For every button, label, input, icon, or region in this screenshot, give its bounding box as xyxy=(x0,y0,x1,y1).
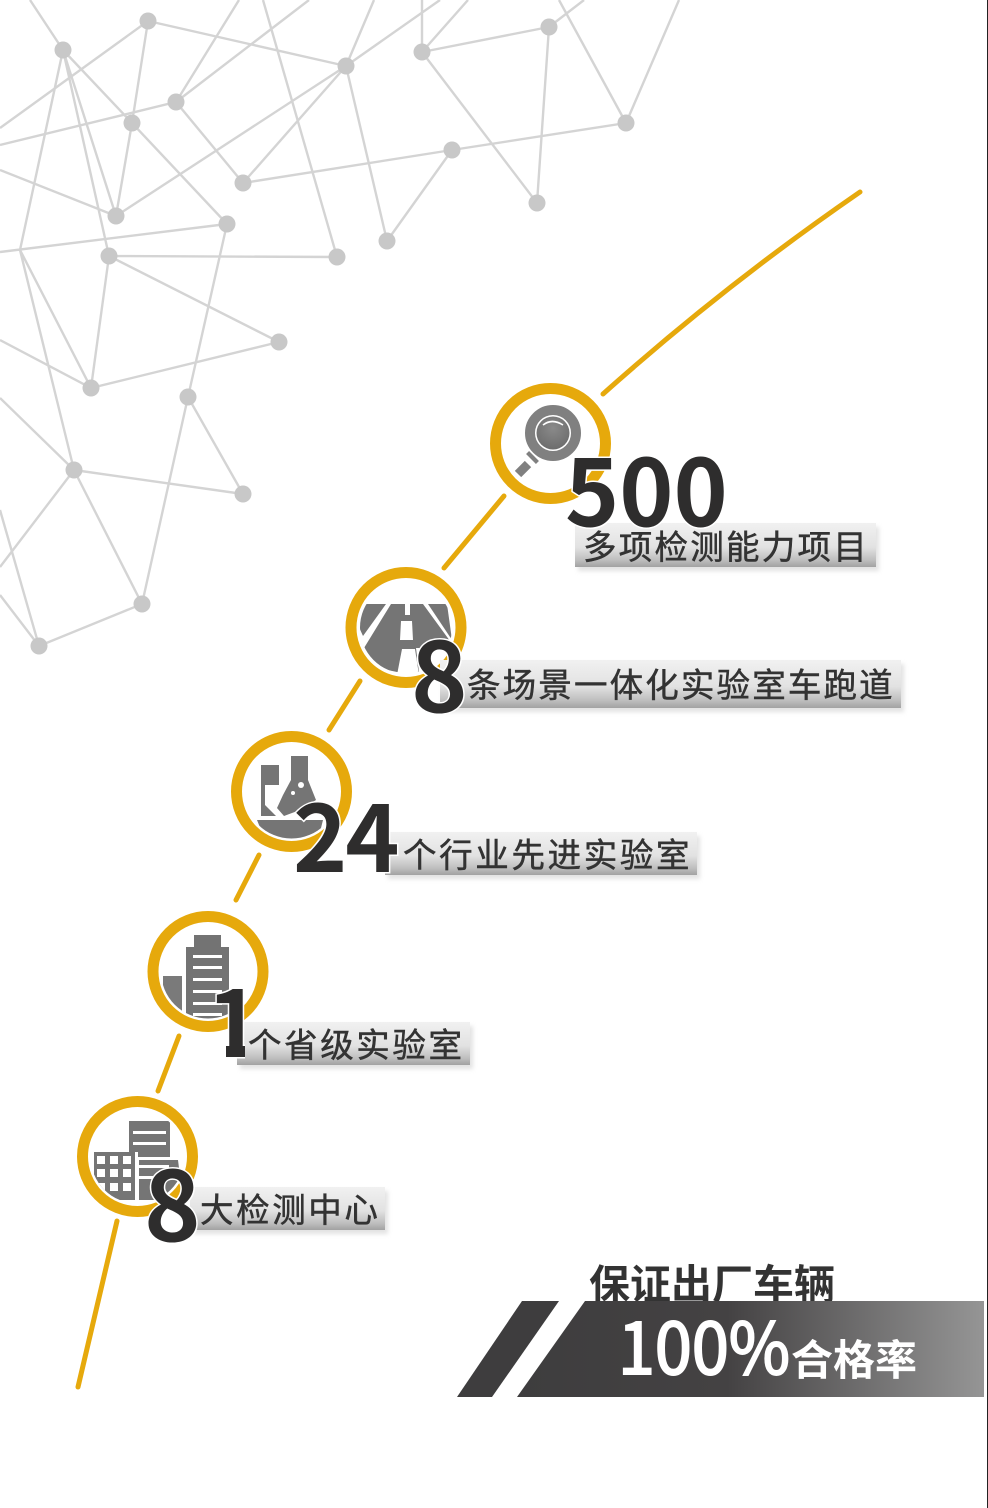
right edge line xyxy=(987,0,988,1508)
pass rate label: 合格率 xyxy=(791,1327,917,1388)
number 8: 8 xyxy=(144,1130,201,1269)
icon ring and magnifier xyxy=(496,388,606,498)
label bar: 个行业先进实验室 xyxy=(403,828,692,877)
step 8: runways xyxy=(351,572,904,740)
gold timeline path xyxy=(78,192,860,1387)
callout heading: 保证出厂车辆 xyxy=(589,1251,835,1311)
background network pattern xyxy=(0,0,679,654)
step 8: inspection centres xyxy=(77,1096,389,1242)
number 8: 8 xyxy=(411,601,468,740)
100% figure: 100% xyxy=(618,1293,790,1395)
step 500: inspection items xyxy=(496,388,879,571)
number 24: 24 xyxy=(293,766,398,899)
icon ring and tower xyxy=(153,916,263,1026)
icon ring and buildings xyxy=(82,1102,192,1212)
number 500: 500 xyxy=(565,420,728,553)
bottom callout xyxy=(457,1251,984,1397)
icon ring and road xyxy=(351,572,461,682)
step 1: provincial lab xyxy=(153,916,473,1084)
gradient banner xyxy=(517,1301,984,1397)
number 1: 1 xyxy=(207,951,261,1084)
label bar: 条场景一体化实验室车跑道 xyxy=(467,658,895,707)
label bar: 多项检测能力项目 xyxy=(583,520,869,569)
icon ring and flask xyxy=(236,736,346,846)
slanted stripe xyxy=(457,1301,559,1397)
label bar: 大检测中心 xyxy=(200,1183,380,1232)
step 24: laboratories xyxy=(236,736,700,899)
label bar: 个省级实验室 xyxy=(248,1018,465,1067)
